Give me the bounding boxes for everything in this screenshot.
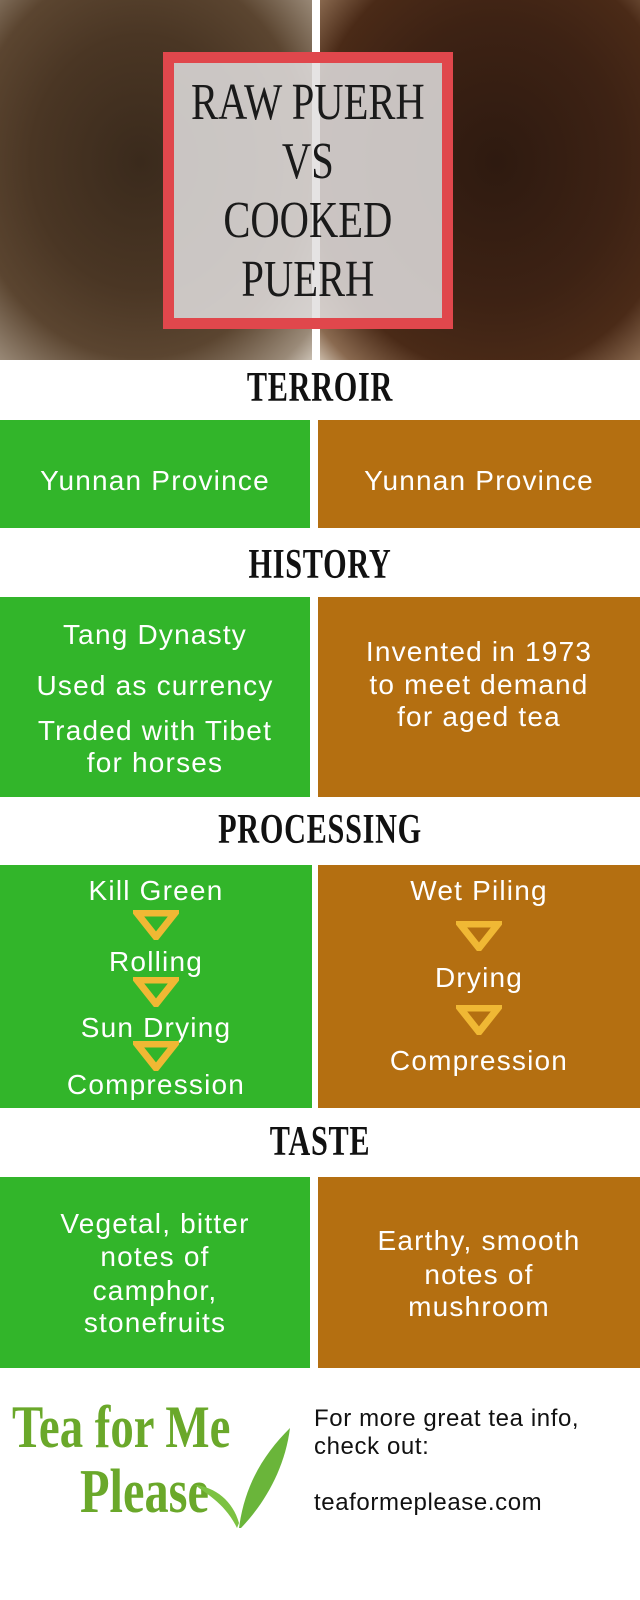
- panel: taste raw: notes of: [100, 1241, 210, 1272]
- photo: cooked puerh cake: [320, 0, 640, 360]
- panel: terroir raw: [0, 420, 310, 528]
- logo: Please: [80, 1458, 209, 1526]
- panel: history cooked: for aged tea: [397, 701, 561, 732]
- heading: terroir: TERROIR: [247, 365, 393, 411]
- panel: terroir raw: Yunnan Province: [40, 465, 270, 496]
- panel: processing raw: Kill Green: [89, 875, 223, 906]
- panel: processing cooked: [318, 865, 640, 1108]
- panel: terroir cooked: Yunnan Province: [364, 465, 594, 496]
- footer text: [314, 1405, 579, 1516]
- footer text: For more great tea info,: [314, 1405, 579, 1432]
- title box: RAW PUERH: [191, 74, 425, 130]
- panel: taste raw: camphor,: [93, 1275, 217, 1306]
- panel: history raw: [0, 597, 310, 797]
- panel: processing raw: Compression: [67, 1069, 245, 1100]
- panel: history raw: Used as currency: [36, 670, 274, 701]
- panel: terroir cooked: [318, 420, 640, 528]
- panel: processing cooked: Compression: [390, 1045, 568, 1076]
- panel: processing cooked: Wet Piling: [410, 875, 548, 906]
- panel: processing raw: Sun Drying: [81, 1012, 231, 1043]
- arrow: [133, 910, 179, 940]
- panel: taste raw: Vegetal, bitter: [60, 1208, 250, 1239]
- panel: processing raw: [0, 865, 312, 1108]
- panel: history cooked: to meet demand: [369, 669, 589, 700]
- title box: [163, 52, 453, 329]
- footer text: teaformeplease.com: [314, 1489, 542, 1516]
- title box: VS: [282, 132, 334, 190]
- panel: taste raw: stonefruits: [84, 1307, 226, 1338]
- arrow: [133, 1041, 179, 1071]
- title box: COOKED: [223, 192, 392, 248]
- panel: history cooked: [318, 597, 640, 797]
- panel: taste raw: [0, 1177, 310, 1368]
- heading: taste: TASTE: [270, 1119, 370, 1165]
- panel: history raw: Tang Dynasty: [63, 619, 247, 650]
- footer text: check out:: [314, 1433, 429, 1460]
- logo: Tea for Me: [12, 1394, 230, 1460]
- panel: taste cooked: notes of: [424, 1259, 534, 1290]
- panel: taste cooked: Earthy, smooth: [377, 1225, 581, 1256]
- arrow: [456, 921, 502, 951]
- panel: processing raw: Rolling: [109, 946, 203, 977]
- arrow: [456, 1005, 502, 1035]
- logo: [12, 1394, 290, 1528]
- panel: taste cooked: mushroom: [408, 1291, 550, 1322]
- panel: taste cooked: [318, 1177, 640, 1368]
- panel: history cooked: Invented in 1973: [366, 636, 592, 667]
- heading: history: HISTORY: [249, 542, 391, 588]
- icon: tea leaf: [196, 1428, 290, 1528]
- panel: history raw: Traded with Tibet: [38, 715, 272, 746]
- heading: processing: PROCESSING: [218, 807, 422, 853]
- panel: processing cooked: Drying: [435, 962, 523, 993]
- photo: raw puerh cake: [0, 0, 312, 360]
- title box: PUERH: [242, 250, 374, 308]
- arrow: [133, 977, 179, 1007]
- panel: history raw: for horses: [87, 747, 223, 778]
